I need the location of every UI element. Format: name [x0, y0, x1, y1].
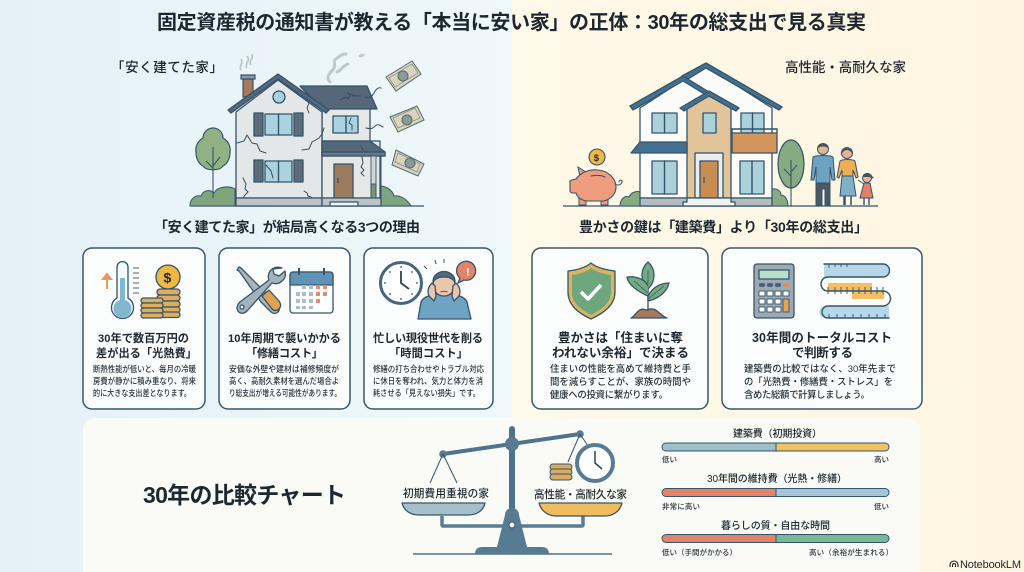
- card body text: [550, 363, 691, 400]
- label: high performance house: 高性能・高耐久な家: [785, 59, 906, 75]
- card body text: 修繕の打ち合わせやトラブル対応: [373, 364, 485, 374]
- illustration: high performance house with piggy bank and family: $: [594, 153, 600, 164]
- card heading: 30年間のトータルコスト: [752, 330, 892, 345]
- card heading: 「時間コスト」: [389, 346, 468, 360]
- scale label: initial-cost house: 初期費用重視の家: [403, 487, 489, 500]
- bar: maintenance cost: [662, 472, 889, 511]
- card heading: [96, 331, 197, 360]
- panel: total cost card: [722, 248, 922, 409]
- panel: time cost card: [364, 248, 493, 409]
- bar: quality of life: 高い（余裕が生まれる）: [809, 547, 893, 557]
- panel: margin card: [532, 248, 708, 409]
- card body text: [229, 364, 341, 398]
- icon: tools and calendar: [237, 267, 333, 313]
- card body text: 健康への投資に繋がります。: [550, 389, 668, 400]
- bar: construction cost: 建築費（初期投資）: [733, 427, 822, 440]
- card heading: われない余裕」で決まる: [552, 345, 689, 360]
- bar: maintenance cost: 非常に高い: [662, 501, 700, 511]
- card body text: 安価な外壁や建材は補修頻度が: [229, 364, 340, 374]
- card heading: [752, 330, 892, 360]
- scale label: high performance house: 高性能・高耐久な家: [534, 488, 627, 501]
- card heading: で判断する: [792, 345, 853, 360]
- background: left blue half: [0, 0, 512, 572]
- card heading: [228, 331, 341, 360]
- card body text: 的に大きな支出差となります。: [93, 388, 191, 398]
- card body text: 住まいの性能を高めて維持費と手: [550, 363, 691, 374]
- illustration: cracked cheap house with flying money: [190, 54, 424, 206]
- icon: shield and sprout: [568, 262, 669, 319]
- card body text: 耗させる「見えない損失」です。: [373, 388, 480, 398]
- card body text: [744, 363, 896, 400]
- icon: calculator and timeline: [754, 264, 890, 318]
- card body text: の「光熱費・修繕費・ストレス」を: [744, 376, 893, 387]
- background: right cream half: [512, 0, 1024, 572]
- label: cheap house: 「安く建てた家」: [111, 59, 223, 75]
- chart heading: 30年の比較チャート: [143, 482, 346, 508]
- panel: repair cost card: [219, 248, 350, 409]
- icon: clock and stressed person: [380, 259, 476, 319]
- card body text: 断熱性能が低いと、毎月の冷暖: [93, 364, 197, 374]
- heading: key to prosperity: 豊かさの鍵は「建築費」より「30年の総支出」: [579, 219, 868, 235]
- card heading: 忙しい現役世代を削る: [373, 331, 483, 345]
- bar: maintenance cost: 低い: [874, 501, 889, 511]
- card body text: 房費が静かに積み重なり、将来: [93, 376, 197, 386]
- card body text: [373, 364, 485, 398]
- icon: balance scale: [402, 426, 622, 554]
- card heading: 「修繕コスト」: [246, 346, 323, 360]
- heading: three reasons: 「安く建てた家」が結局高くなる3つの理由: [154, 219, 420, 235]
- icon: thermometer and coins: [103, 262, 180, 319]
- card body text: に休日を奪われ、気力と体力を消: [373, 376, 483, 386]
- title: 固定資産税の通知書が教える「本当に安い家」の正体：30年の総支出で見る真実: [157, 10, 866, 34]
- panel: 30 year comparison chart: [83, 418, 920, 572]
- card body text: 高く、高耐久素材を選んだ場合よ: [229, 376, 339, 386]
- card body text: 含めた総額で計算しましょう。: [744, 389, 870, 400]
- bar: construction cost: 低い: [662, 454, 677, 464]
- bar: quality of life: 低い（手間がかかる）: [662, 547, 737, 557]
- card heading: [373, 331, 483, 360]
- bar: construction cost: 高い: [874, 454, 889, 464]
- card heading: 差が出る「光熱費」: [96, 346, 197, 360]
- bar: quality of life: 暮らしの質・自由な時間: [721, 519, 830, 532]
- card body text: 間を減らすことが、家族の時間や: [550, 376, 691, 387]
- bar: maintenance cost: 30年間の維持費（光熱・修繕）: [707, 472, 847, 485]
- card heading: 10年周期で襲いかかる: [228, 331, 341, 345]
- card heading: 豊かさは「住まいに奪: [558, 330, 683, 345]
- icon: thermometer and coins: $: [164, 270, 172, 286]
- panel: utility cost card: [83, 248, 205, 409]
- card body text: 建築費の比較ではなく、30年先まで: [744, 363, 896, 374]
- watermark: NotebookLM: NotebookLM: [960, 559, 1021, 571]
- bar: quality of life: [662, 519, 893, 557]
- illustration: high performance house with piggy bank and family: [563, 63, 878, 206]
- bar: construction cost: [662, 427, 889, 464]
- card body text: [93, 364, 197, 398]
- card heading: [552, 330, 689, 360]
- icon: clock and stressed person: !: [466, 266, 470, 278]
- card heading: 30年で数百万円の: [98, 331, 189, 345]
- card body text: り総支出が増える可能性があります。: [229, 388, 341, 398]
